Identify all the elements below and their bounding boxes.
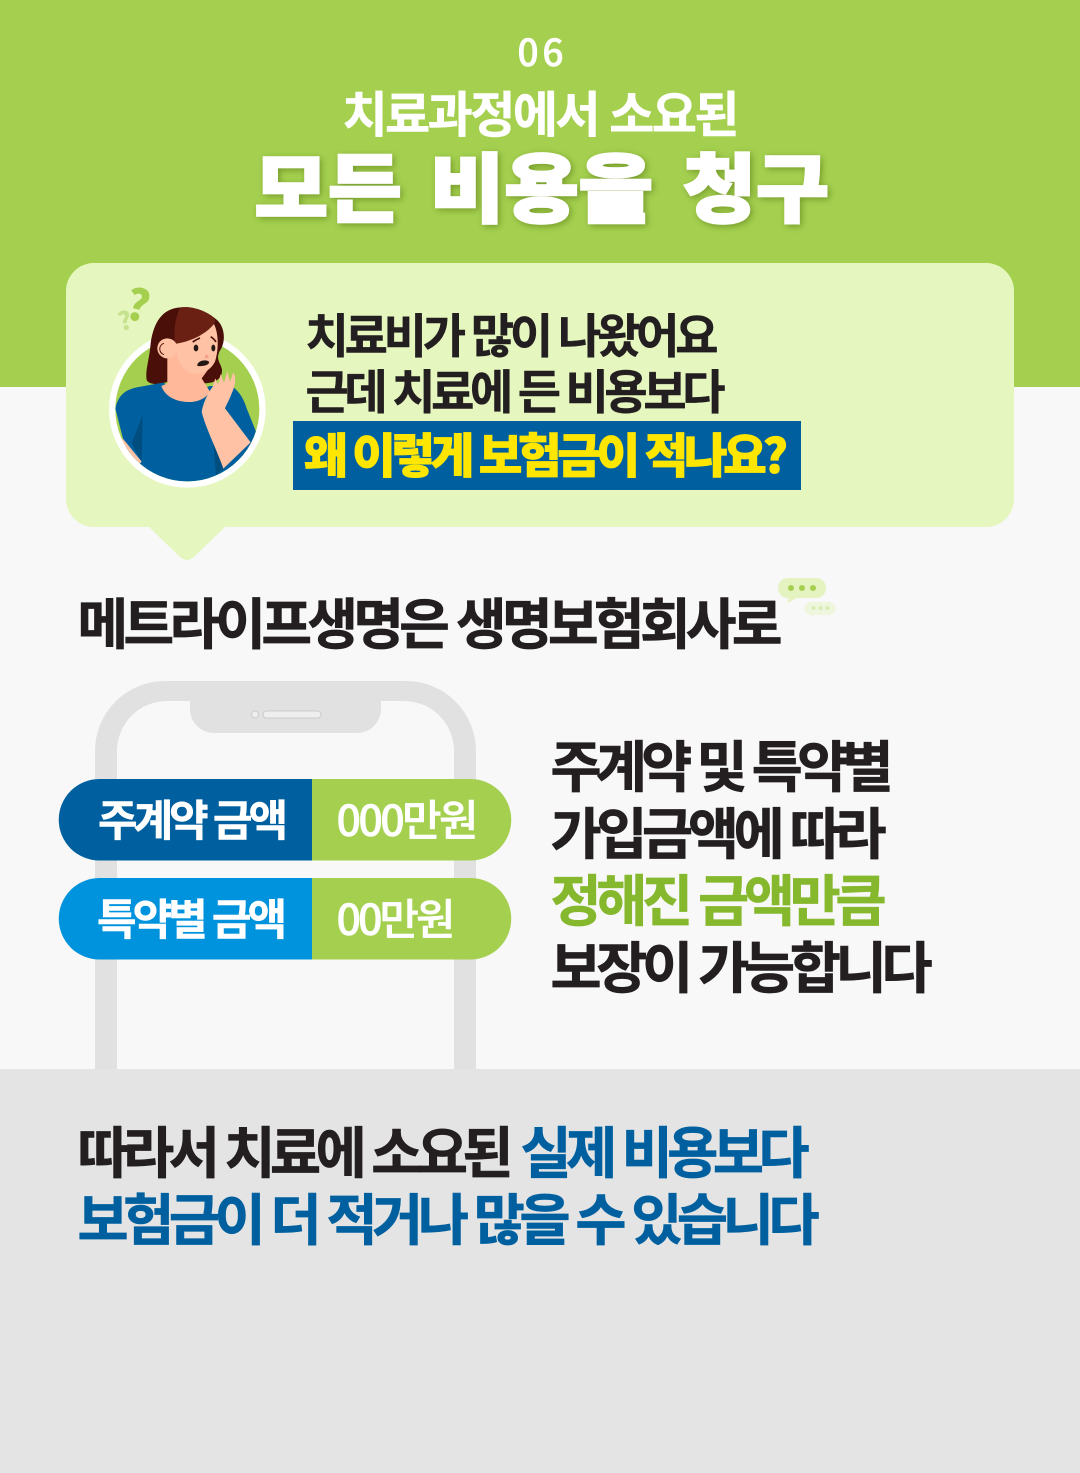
text block: coverage explanation <box>550 723 932 1004</box>
pill: rider amount: 00만원 <box>336 886 456 948</box>
pill: main contract amount: 주계약 금액 <box>98 787 288 849</box>
icon: question marks: ? <box>121 270 156 336</box>
highlighted question: 왜 이렇게 보험금이 적나요? <box>304 418 788 487</box>
main title: 모든 <box>254 129 402 238</box>
pill: main contract amount: 000만원 <box>336 787 478 849</box>
section number: 06 <box>518 23 564 77</box>
icon: worried woman in circle <box>109 270 266 488</box>
footer text: 따라서 치료에 소요된 <box>78 1109 514 1189</box>
bubble text line 2: 근데 치료에 든 비용보다 <box>306 354 726 423</box>
icon: question marks: ? <box>114 301 136 339</box>
subtitle: 치료과정에서 소요된 <box>342 76 740 147</box>
green header band <box>0 0 1080 387</box>
bubble text line 1: 치료비가 많이 나왔어요 <box>306 298 718 367</box>
panel: question speech bubble <box>66 263 1014 560</box>
icon: chat bubbles <box>778 578 836 617</box>
main title: 청구 <box>683 129 829 238</box>
footer text: 실제 비용보다 <box>520 1109 810 1189</box>
footer text <box>78 1109 820 1256</box>
text block: coverage explanation: 주계약 및 특약별 <box>550 723 894 803</box>
text block: coverage explanation: 정해진 금액만큼 <box>550 857 886 937</box>
heading: company description: 메트라이프생명은 생명보험회사로 <box>78 580 782 660</box>
pill: rider amount: 특약별 금액 <box>97 886 287 948</box>
footer text: 보험금이 더 적거나 많을 수 있습니다 <box>78 1176 820 1256</box>
text block: coverage explanation: 가입금액에 따라 <box>550 790 886 870</box>
main title: 비용을 <box>430 129 653 238</box>
main title <box>254 129 829 238</box>
footer panel <box>0 1069 1080 1473</box>
pill: rider amount <box>59 878 511 960</box>
text block: coverage explanation: 보장이 가능합니다 <box>550 924 932 1004</box>
icon: phone outline <box>95 681 476 1069</box>
pill: main contract amount <box>59 779 511 860</box>
